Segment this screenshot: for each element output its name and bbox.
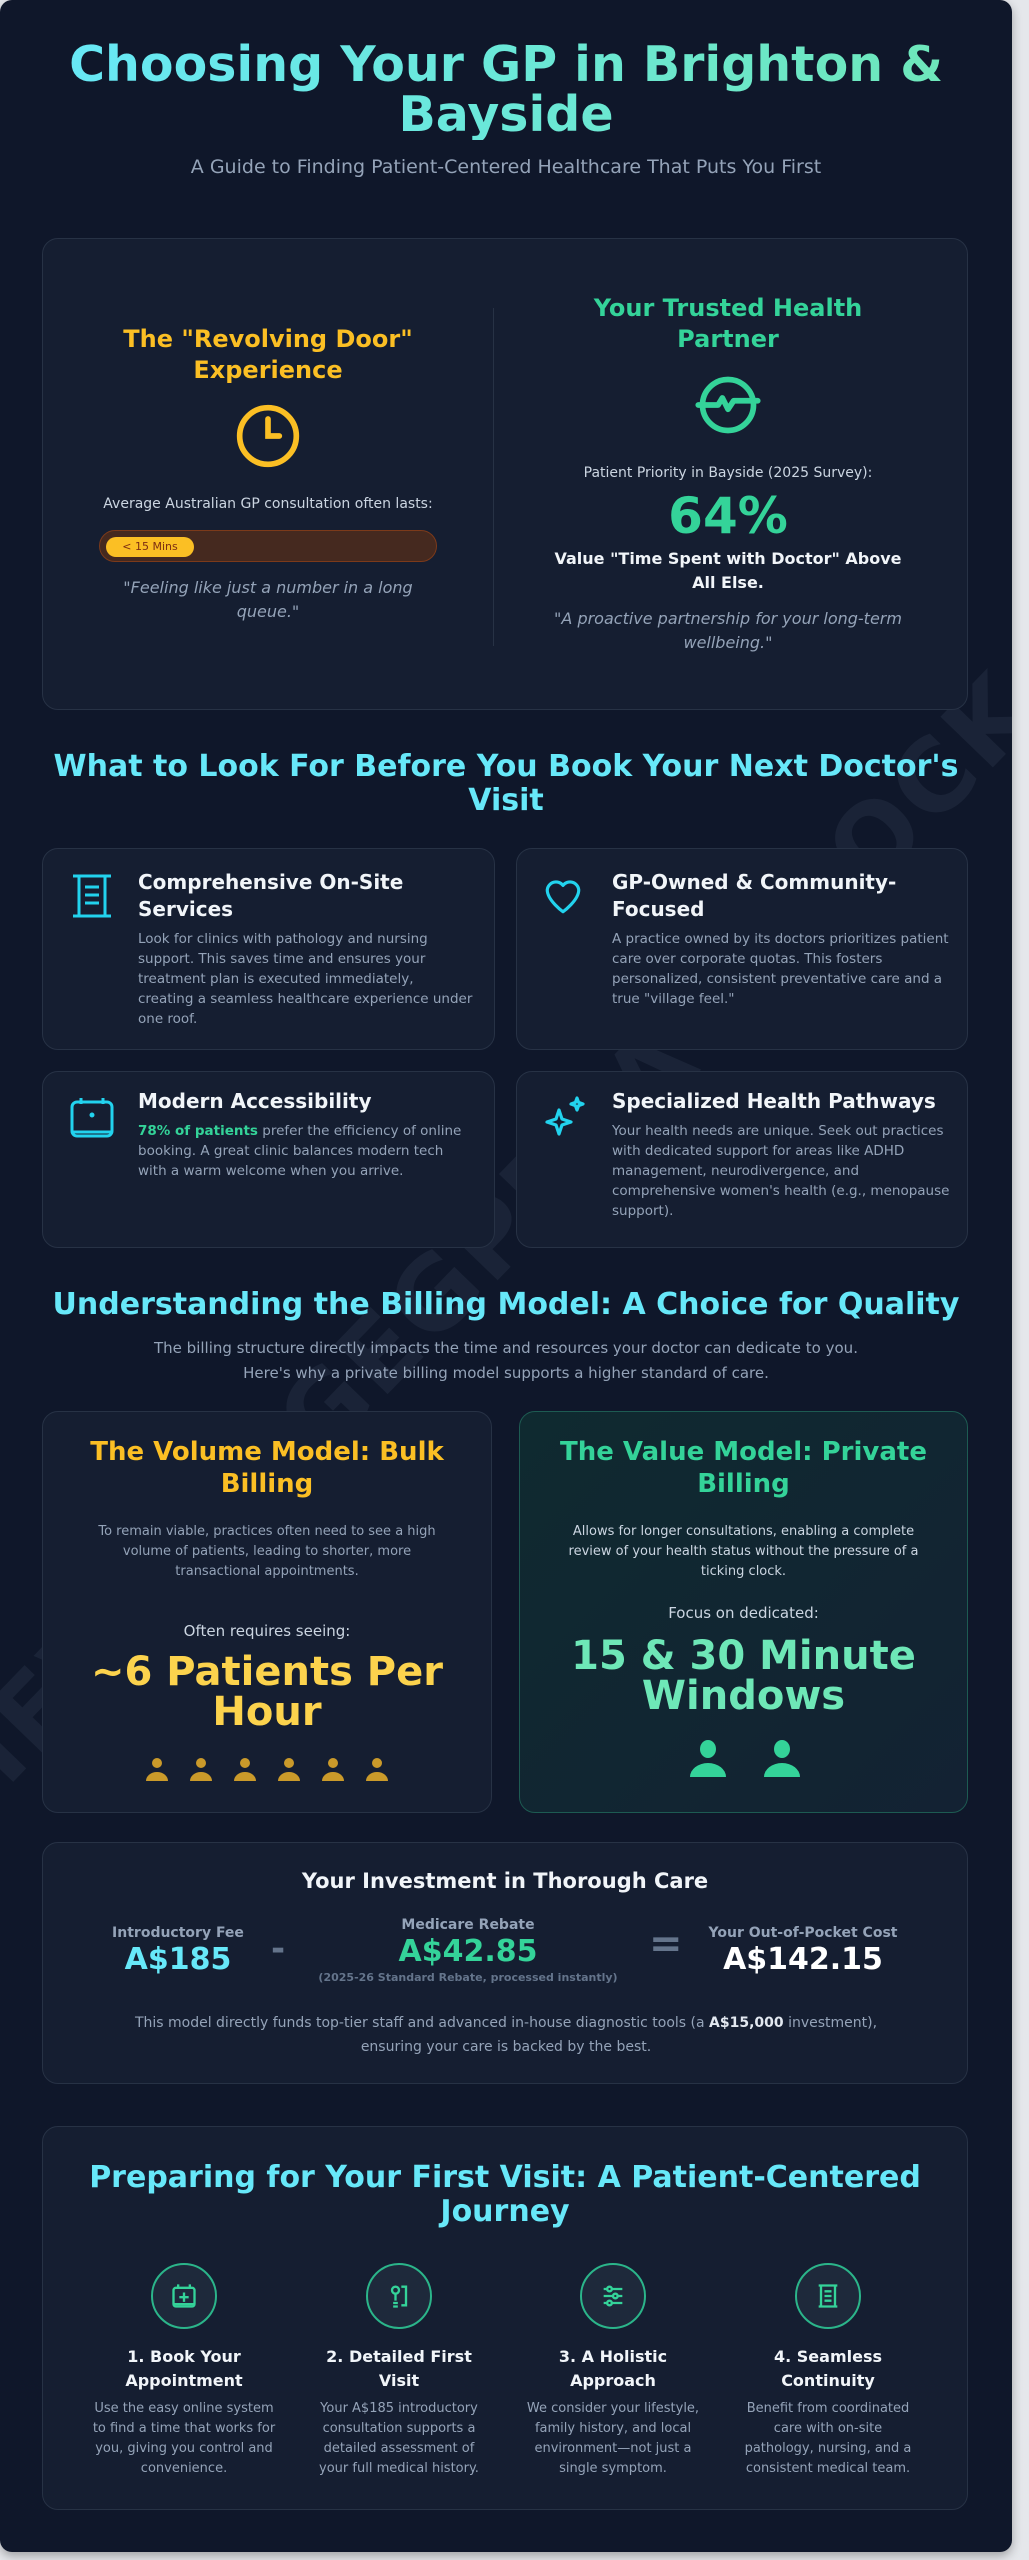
cost: medicare rebate: Medicare Rebate [401, 1917, 535, 1933]
step 3: We consider your lifestyle, family history, and local environment—not just a single symptom. [527, 2401, 699, 2476]
card: gp-owned: GP-Owned & Community-Focused [612, 870, 896, 921]
step 3: 3. A Holistic [559, 2347, 667, 2366]
step 1: 1. Book Your [127, 2347, 241, 2366]
card: modern accessibility: Modern Accessibility [138, 1089, 372, 1113]
step 3 [527, 2263, 699, 2476]
icon: sparkles [545, 1096, 585, 1136]
step 1: Appointment [125, 2371, 243, 2390]
card: specialized pathways: Your health needs are unique. Seek out practices with dedicated support for areas like ADHD management, neurodivergence, and comprehensive women's health (e.g., menopause support). [612, 1123, 949, 1219]
billing intro text: The billing structure directly impacts the time and resources your doctor can dedicate to you. [154, 1339, 858, 1357]
panel: private billing: The Value Model: Private Billing [560, 1437, 927, 1499]
step 2: Your A$185 introductory consultation supports a detailed assessment of your full medical history. [319, 2401, 479, 2476]
cost: out-of-pocket: A$142.15 [723, 1942, 883, 1977]
billing intro text [154, 1339, 858, 1382]
step 2: 2. Detailed First [326, 2347, 472, 2366]
panel: bulk billing: Often requires seeing: [184, 1622, 350, 1640]
cost: intro fee: A$185 [125, 1942, 231, 1977]
panel: bulk billing: ~6 Patients Per Hour [91, 1649, 443, 1735]
step 2: Visit [379, 2371, 419, 2390]
card: gp-owned: A practice owned by its doctors prioritizes patient care over corporate quotas. This fosters personalized, consistent preventative care and a true "village feel." [612, 931, 949, 1007]
panel: private billing: Allows for longer consultations, enabling a complete review of your health status without the pressure of a ticking clock. [569, 1524, 918, 1579]
heading: billing model: Understanding the Billing Model: A Choice for Quality [53, 1287, 959, 1322]
left: revolving door: The "Revolving Door" Experience [123, 325, 413, 384]
card: on-site services: Look for clinics with pathology and nursing support. This saves time and ensures your treatment plan is executed immediately, creating a seamless healthcare experience under one roof. [138, 931, 472, 1027]
right: trusted partner: "A proactive partnership for your long-term wellbeing." [554, 609, 902, 652]
cost: medicare rebate: A$42.85 [398, 1934, 537, 1969]
icon: building [73, 874, 111, 918]
right: trusted partner: Value "Time Spent with Doctor" Above All Else. [554, 549, 902, 592]
left: revolving door: "Feeling like just a number in a long queue." [123, 578, 413, 621]
right: trusted partner [554, 294, 902, 652]
panel: investment [42, 1842, 968, 2084]
panel: private billing [519, 1411, 968, 1813]
step 4: 4. Seamless [774, 2347, 882, 2366]
icons: two patients [690, 1740, 800, 1777]
cost: medicare rebate [318, 1917, 618, 1984]
step 3: Approach [570, 2371, 656, 2390]
card: gp-owned [516, 848, 968, 1050]
panel: comparison [42, 238, 968, 710]
panel: investment: Your Investment in Thorough Care [302, 1869, 708, 1893]
subtitle: A Guide to Finding Patient-Centered Healthcare That Puts You First [191, 156, 821, 178]
panel: private billing: Focus on dedicated: [668, 1604, 819, 1622]
panel: private billing: 15 & 30 Minute Windows [571, 1633, 916, 1719]
bar: consultation length: < 15 Mins [122, 540, 178, 553]
cost: medicare rebate: (2025-26 Standard Rebate, processed instantly) [318, 1971, 618, 1984]
card: specialized pathways [516, 1071, 968, 1248]
icon: heart [546, 880, 580, 914]
panel: bulk billing: The Volume Model: Bulk Billing [90, 1437, 444, 1499]
title: Choosing Your GP in Brighton & Bayside [69, 36, 943, 143]
panel: investment: - [271, 1929, 285, 1969]
panel: journey [42, 2126, 968, 2510]
bar: consultation length [99, 530, 437, 562]
cost: intro fee: Introductory Fee [112, 1925, 244, 1941]
right: trusted partner: Patient Priority in Bayside (2025 Survey): [584, 465, 872, 481]
left: revolving door: Average Australian GP consultation often lasts: [103, 496, 433, 512]
step 4 [745, 2263, 911, 2476]
card: on-site services [42, 848, 495, 1050]
right: trusted partner: Your Trusted Health Partner [594, 294, 862, 353]
panel: bulk billing: To remain viable, practices often need to see a high volume of patients, leading to shorter, more transactional appointments. [98, 1524, 436, 1579]
heading: what to look for: What to Look For Before You Book Your Next Doctor's Visit [54, 749, 958, 818]
right: trusted partner: 64% [668, 487, 788, 545]
icon: heartbeat [695, 376, 761, 434]
card: modern accessibility: 78% of patients prefer the efficiency of online booking. A great clinic balances modern tech with a warm welcome when you arrive. [138, 1123, 461, 1179]
icons: six patients [146, 1758, 388, 1781]
step 4: Continuity [781, 2371, 875, 2390]
icon: tablet calendar [70, 1098, 114, 1138]
panel: journey: Preparing for Your First Visit: A Patient-Centered Journey [89, 2160, 921, 2229]
card: on-site services: Comprehensive On-Site Services [138, 870, 403, 921]
card: modern accessibility [42, 1071, 495, 1248]
step 1: Use the easy online system to find a time that works for you, giving you control and convenience. [93, 2401, 275, 2476]
billing intro text: Here's why a private billing model supports a higher standard of care. [243, 1364, 769, 1382]
panel: investment: = [649, 1921, 683, 1967]
step 4: Benefit from coordinated care with on-site pathology, nursing, and a consistent medical team. [745, 2401, 911, 2476]
card: specialized pathways: Specialized Health Pathways [612, 1089, 936, 1113]
panel: bulk billing [42, 1411, 492, 1813]
cost: out-of-pocket: Your Out-of-Pocket Cost [709, 1925, 897, 1941]
panel: investment: This model directly funds top-tier staff and advanced in-house diagnostic tools (a A$15,000 investment), ensuring your care is backed by the best. [135, 2015, 877, 2055]
cost: out-of-pocket [708, 1925, 898, 1977]
icon: clock [236, 404, 300, 468]
step 1 [93, 2263, 276, 2476]
cost: intro fee [112, 1925, 244, 1977]
step 2 [319, 2263, 479, 2476]
left: revolving door [99, 325, 437, 621]
